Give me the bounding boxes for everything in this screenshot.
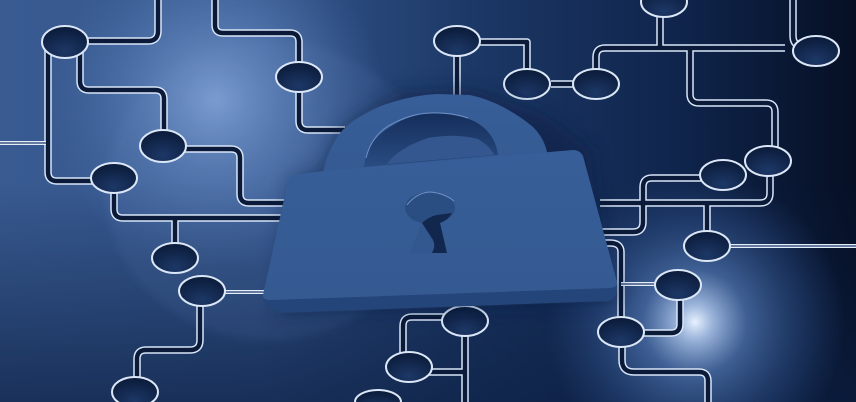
lock body <box>263 150 617 300</box>
lock shackle <box>323 94 547 180</box>
lock shadow <box>277 88 625 314</box>
lock base edge <box>263 282 617 313</box>
padlock <box>263 88 625 314</box>
shackle opening <box>364 113 498 167</box>
keyhole <box>405 192 455 253</box>
